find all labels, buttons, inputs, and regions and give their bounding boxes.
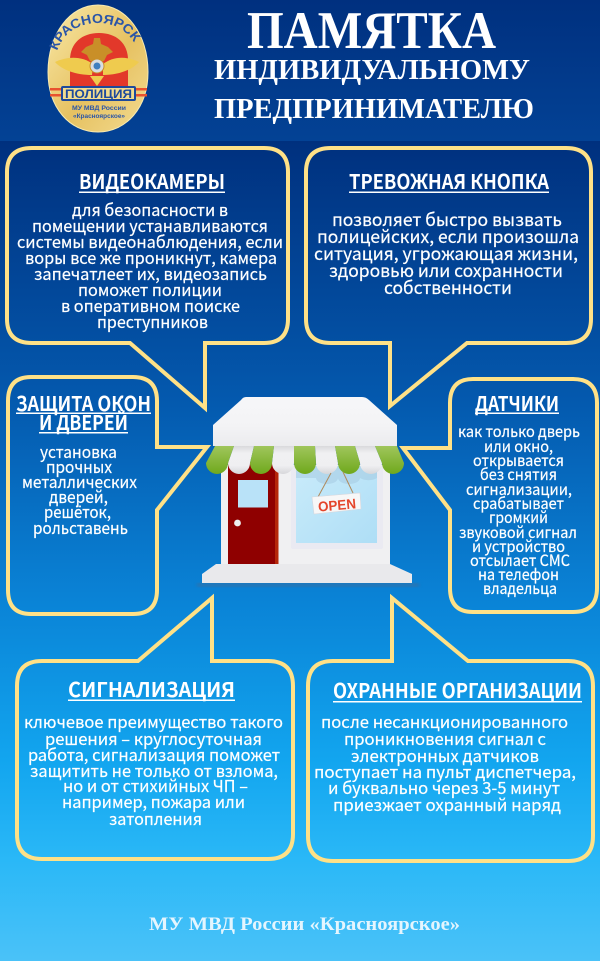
badge caption: «Красноярское» [73,113,125,120]
title: ПАМЯТКА [247,2,496,60]
text: alarm button: здоровью или сохранности [329,258,563,283]
text: windows and doors [22,439,137,539]
store wall [221,465,390,565]
store shadow [197,583,419,587]
text: video cameras: запечатлеет их, видеозапись [34,261,267,285]
text: video cameras: для безопасности в [72,197,228,221]
text: video cameras: помещении устанавливаются [32,213,268,237]
text: sensors: громкий [489,506,548,528]
heading: sensors: ДАТЧИКИ [475,388,559,417]
store window [291,466,383,549]
open sign [312,472,361,515]
text: sensors: открывается [473,449,564,471]
text: video cameras: системы видеонаблюдения, если [17,229,283,253]
footer: МУ МВД России «Красноярское» [149,914,460,935]
text: sensors: отсылает СМС [470,549,570,571]
text: alarm button: ситуация, угрожающая жизни, [314,241,578,266]
text: sensors: или окно, [484,435,553,457]
text: sensors: звуковой сигнал [459,521,577,543]
store roof [213,397,397,446]
heading: windows and doors: ЗАЩИТА ОКОН [16,388,151,417]
panel: alarm system [17,598,293,859]
badge city name: КРАСНОЯРСК [49,14,141,50]
panel: windows and doors [8,377,207,614]
text: windows and doors: дверей, [49,484,108,508]
heading: security companies: ОХРАННЫЕ ОРГАНИЗАЦИИ [333,675,582,704]
text: video cameras: в оперативном поиске [61,293,240,317]
text: alarm button: собственности [384,275,512,300]
panel: video cameras [7,148,288,408]
text: security companies: после несанкционированного [321,709,568,733]
text: security companies [314,709,576,816]
open sign: OPEN [317,495,357,515]
text: sensors: срабатывает [473,492,564,514]
text: security companies: электронных датчиков [351,743,539,767]
text: security companies: поступает на пульт диспетчера, [314,759,576,783]
text: alarm system: защитить не только от взлома, [30,758,278,782]
badge caption [72,105,126,120]
police badge [48,4,148,132]
header band [0,0,600,141]
title: ПРЕДПРИНИМАТЕЛЮ [214,93,534,125]
text: windows and doors: металлических [22,469,137,493]
text: windows and doors: решёток, [44,499,111,523]
heading: video cameras: ВИДЕОКАМЕРЫ [79,166,225,195]
text: windows and doors: установка [40,439,117,463]
text: sensors: сигнализации, [466,478,572,500]
text: security companies: приезжает охранный наряд [333,792,561,816]
text: alarm button: позволяет быстро вызвать [332,207,562,232]
text: sensors: владельца [483,577,557,599]
heading: windows and doors: И ДВЕРЕЙ [39,407,128,436]
panel: alarm button [306,148,591,406]
illustration: storefront [197,397,419,587]
heading: windows and doors [16,388,151,436]
text: alarm system [24,709,283,830]
text: video cameras: преступников [97,309,208,333]
badge caption: МУ МВД России [72,105,126,112]
text: video cameras: поможет полиции [78,277,222,301]
text: windows and doors: прочных [46,454,112,478]
text: alarm system: но и от стихийных ЧП – [63,773,248,797]
awning stripes [206,446,404,474]
text: alarm system: ключевое преимущество такого [24,709,283,733]
text: sensors: как только дверь [458,420,580,442]
text: alarm system: затопления [109,806,202,830]
text: video cameras: воры все же проникнут, камера [25,245,277,269]
text: alarm button [314,207,579,300]
panel: sensors [403,379,597,612]
text: sensors [458,420,580,599]
text: windows and doors: рольставень [33,515,128,539]
text: video cameras [17,197,283,333]
badge stripes [50,88,147,96]
title [214,2,534,125]
text: security companies: проникновения сигнал с [344,726,546,750]
panel: security companies [308,598,593,861]
title: ИНДИВИДУАЛЬНОМУ [214,54,530,86]
text: alarm system: работа, сигнализация поможет [28,742,280,766]
text: sensors: на телефон [478,563,559,585]
badge banner: ПОЛИЦИЯ [65,89,132,101]
text: alarm system: решения – круглосуточная [45,726,262,750]
heading: alarm button: ТРЕВОЖНАЯ КНОПКА [349,166,549,195]
text: security companies: и буквально через 3-5 минут [328,775,560,799]
text: alarm system: например, пожара или [62,789,245,813]
heading: alarm system: СИГНАЛИЗАЦИЯ [68,674,235,703]
store base [202,564,412,583]
text: sensors: без снятия [480,463,557,485]
store door [222,462,286,568]
eagle emblem [55,38,139,86]
text: alarm button: полицейских, если произошла [317,224,579,249]
text: sensors: и устройство [472,535,565,557]
